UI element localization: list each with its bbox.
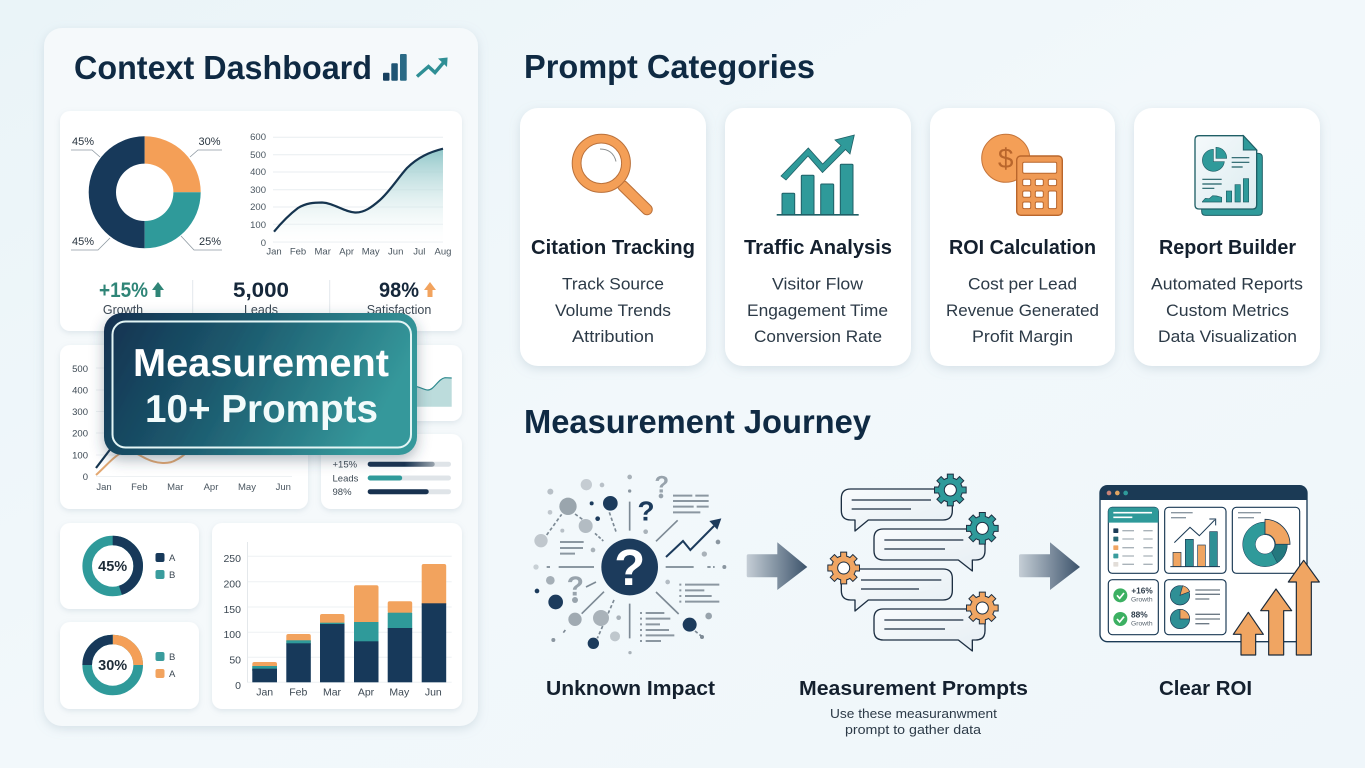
heading: Measurement Journey: Measurement Journey [524, 403, 872, 440]
card: donut 45%: A [169, 553, 176, 564]
stat: satisfaction: Satisfaction [367, 303, 431, 317]
list: ROI Calculation items: Revenue Generated [946, 301, 1099, 320]
list: Report Builder items: Automated Reports [1151, 274, 1303, 294]
stat: leads: Leads [244, 303, 278, 317]
card: donut 30% [60, 622, 199, 709]
list: Traffic Analysis items [747, 274, 888, 346]
card: Report Builder [1134, 108, 1320, 366]
card: stacked bar chart: 0 [235, 680, 241, 692]
illustration: ROI dashboard window: +16% [1131, 587, 1153, 596]
title: Traffic Analysis: Traffic Analysis [744, 237, 892, 259]
illustration: unknown impact scatter: ? [567, 571, 584, 602]
list: Report Builder items: Custom Metrics [1166, 301, 1289, 320]
card: stacked bar chart: 50 [229, 655, 241, 667]
stat: growth: +15% [99, 279, 148, 302]
illustration: unknown impact scatter: ? [614, 539, 645, 596]
card: line chart: Mar [167, 482, 183, 493]
card: line chart: 200 [72, 428, 88, 440]
card: stacked bar chart: 100 [223, 629, 241, 641]
card: stacked bar chart: 150 [223, 604, 241, 616]
area chart: monthly trend: 600 [250, 132, 266, 143]
badge: Measurement 10+ Prompts: Measurement [133, 342, 389, 385]
list: Traffic Analysis items: Visitor Flow [772, 274, 864, 294]
card: stacked bar chart [212, 523, 462, 709]
icon: teal gear middle [966, 512, 999, 545]
card: stacked bar chart: Mar [323, 686, 342, 698]
list: Traffic Analysis items: Engagement Time [747, 301, 888, 320]
list: ROI Calculation items: Cost per Lead [968, 274, 1077, 294]
card: line chart: 500 [72, 364, 88, 375]
card: line chart: Jan [96, 482, 112, 493]
card: donut 45% [60, 523, 199, 609]
label: Clear ROI: Clear ROI [1159, 677, 1252, 700]
list: Citation Tracking items: Attribution [572, 327, 654, 346]
area chart: monthly trend: May [362, 246, 380, 258]
badge: Measurement 10+ Prompts: 10+ Prompts [145, 388, 378, 431]
area chart: monthly trend: Mar [315, 246, 331, 258]
card: line chart: 300 [72, 407, 88, 418]
arrow: prompts to clear ROI [1019, 542, 1080, 590]
card: progress bars: +15% [332, 460, 358, 470]
label: Measurement Prompts: Measurement Prompts [799, 677, 1028, 700]
icon: teal gear top [934, 474, 967, 506]
list: Citation Tracking items [555, 274, 671, 346]
card: stacked bar chart: 250 [223, 553, 241, 565]
heading: Context Dashboard: Context Dashboard [74, 49, 372, 86]
area chart: monthly trend: Feb [290, 246, 306, 258]
card: stacked bar chart: Apr [358, 686, 375, 698]
list: ROI Calculation items: Profit Margin [972, 327, 1073, 346]
donut chart: share breakdown: 30% [198, 136, 221, 148]
card: mini area chart [321, 345, 462, 421]
card: stacked bar chart: Feb [289, 686, 308, 698]
list: ROI Calculation items [946, 274, 1099, 346]
card: Traffic Analysis [725, 108, 911, 366]
illustration: ROI dashboard window: 88% [1131, 611, 1148, 620]
title: Report Builder: Report Builder [1159, 237, 1296, 259]
card: stacked bar chart: Jan [256, 686, 273, 698]
donut chart: share breakdown: 45% [72, 236, 94, 248]
list: Citation Tracking items: Track Source [562, 274, 664, 294]
donut chart: share breakdown: 25% [199, 236, 221, 248]
area chart: monthly trend: Jan [266, 246, 282, 258]
card: ROI Calculation [930, 108, 1115, 366]
card: stacked bar chart: 200 [223, 579, 241, 591]
panel: context dashboard [44, 28, 478, 726]
stat: satisfaction: 98% [379, 279, 419, 302]
stat: growth: Growth [103, 303, 143, 317]
card: Citation Tracking [520, 108, 706, 366]
card: donut 30%: 30% [98, 658, 127, 674]
label: Unknown Impact: Unknown Impact [546, 677, 715, 700]
text: measurement prompts caption: Use these measuranwment [830, 706, 997, 721]
card: line chart: 100 [72, 450, 88, 462]
card: donut, area chart and stats [60, 111, 462, 331]
area chart: monthly trend: Aug [435, 246, 451, 258]
title: Citation Tracking: Citation Tracking [531, 237, 695, 259]
card: line chart: Jun [276, 482, 291, 493]
illustration: ROI dashboard window: Growth [1131, 622, 1153, 628]
area chart: monthly trend: 300 [250, 185, 266, 196]
icon: coin and calculator [982, 134, 1062, 215]
card: donut 30%: A [169, 669, 176, 680]
card: progress bars: 98% [332, 487, 352, 498]
card: stacked bar chart: May [389, 686, 410, 698]
card: donut 45%: B [169, 570, 175, 581]
donut chart: share breakdown [71, 136, 222, 250]
stat: growth [99, 279, 164, 317]
heading: Prompt Categories: Prompt Categories [524, 48, 815, 85]
illustration: unknown impact scatter [533, 471, 726, 654]
stat: satisfaction [367, 279, 436, 317]
card: donut 30%: B [169, 652, 175, 663]
icon: coin and calculator: $ [998, 143, 1014, 174]
icon: bars with rising arrow [777, 135, 859, 215]
stat: leads: 5,000 [233, 279, 289, 302]
area chart: monthly trend: 500 [250, 150, 266, 161]
card: donut 45%: 45% [98, 559, 127, 575]
stat: leads [233, 279, 289, 317]
icon: report document [1195, 136, 1262, 215]
card: line chart: Feb [131, 482, 147, 493]
area chart: monthly trend: 200 [250, 202, 266, 213]
area chart: monthly trend: 0 [261, 238, 266, 249]
card: progress bars [321, 434, 462, 509]
illustration: ROI dashboard window [1100, 486, 1319, 655]
donut chart: share breakdown: 45% [72, 136, 94, 148]
text: measurement prompts caption: prompt to gather data [845, 722, 982, 737]
area chart: monthly trend: 400 [250, 167, 266, 178]
card: line chart [60, 345, 308, 509]
illustration: prompt bubbles with gears [827, 474, 999, 651]
card: line chart: 0 [83, 472, 88, 483]
list: Report Builder items: Data Visualization [1158, 327, 1297, 346]
area chart: monthly trend [250, 132, 451, 258]
list: Report Builder items [1151, 274, 1303, 346]
card: line chart: Apr [204, 482, 218, 493]
illustration: ROI dashboard window: Growth [1131, 598, 1153, 604]
area chart: monthly trend: 100 [250, 220, 266, 231]
arrow: unknown impact to prompts [747, 542, 807, 590]
card: progress bars: Leads [332, 474, 359, 484]
icon: rising orange arrows [1233, 560, 1319, 655]
area chart: monthly trend: Apr [339, 246, 354, 258]
icon: orange gear left [827, 552, 860, 584]
area chart: monthly trend: Jul [413, 246, 425, 258]
icon: magnifying glass [577, 139, 647, 210]
title: ROI Calculation: ROI Calculation [949, 237, 1096, 259]
area chart: monthly trend: Jun [388, 246, 403, 258]
card: stacked bar chart: Jun [425, 686, 442, 698]
card: line chart: 400 [72, 386, 88, 396]
icon: orange gear bottom [966, 592, 999, 624]
illustration: unknown impact scatter: ? [637, 495, 655, 526]
card: line chart: May [238, 482, 256, 493]
list: Traffic Analysis items: Conversion Rate [754, 327, 882, 346]
list: Citation Tracking items: Volume Trends [555, 301, 671, 320]
text: measurement prompts caption [830, 706, 997, 737]
badge: Measurement 10+ Prompts [104, 313, 417, 455]
illustration: unknown impact scatter: ? [654, 471, 669, 498]
